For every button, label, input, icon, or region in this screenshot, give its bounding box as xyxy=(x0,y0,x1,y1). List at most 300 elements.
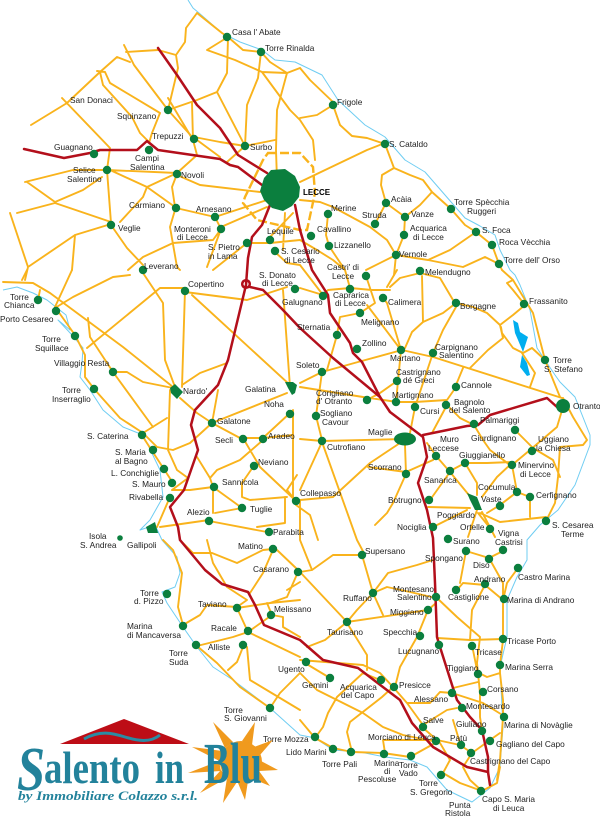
town: Melissano xyxy=(267,604,312,619)
town: Torre S. Stefano xyxy=(541,355,583,374)
town: Collepasso xyxy=(292,488,341,505)
town: Otranto: Otranto xyxy=(573,401,600,411)
town: Frigole: Frigole xyxy=(337,97,363,107)
town: Surbo xyxy=(241,142,273,152)
town: Montesardo: Montesardo xyxy=(466,701,510,711)
town: Martignano xyxy=(392,390,434,406)
town: Torre dell' Orso xyxy=(495,255,560,268)
town: Galatina: Galatina xyxy=(245,384,276,394)
town: Sternatia xyxy=(297,322,341,339)
town: Torre Squillace: Torre xyxy=(42,334,61,344)
town: Villaggio Resta xyxy=(54,358,117,376)
town: Torre Inserraglio: Torre xyxy=(62,385,81,395)
town: Patu xyxy=(450,733,467,749)
town: Torre Suda xyxy=(169,641,200,667)
town: Ortelle xyxy=(460,522,494,533)
town: Supersano xyxy=(358,546,406,559)
town: Marina di Pescoluse xyxy=(358,750,400,784)
town: Aradeo xyxy=(259,431,295,443)
town: Torre Specchia Ruggeri xyxy=(447,197,510,216)
town: Giuggianello: Giuggianello xyxy=(459,450,506,460)
town: Acquarica di Lecce: Acquarica xyxy=(410,223,447,233)
town: Andrano xyxy=(474,574,506,588)
town: Copertino: Copertino xyxy=(188,279,224,289)
town: Salve xyxy=(419,715,444,731)
town: S. Cesarea Terme: S. Cesarea xyxy=(552,520,594,530)
town: Galatone: Galatone xyxy=(217,416,251,426)
town: Lequile: Lequile xyxy=(267,226,294,236)
town: Campi Salentina xyxy=(130,146,165,172)
town: Galugnano xyxy=(282,292,327,307)
town: Punta Ristola: Punta xyxy=(449,800,471,810)
town: Uggiano la Chiesa: la Chiesa xyxy=(536,443,571,453)
town: Castri' di Lecce xyxy=(327,262,370,281)
town: Melissano: Melissano xyxy=(274,604,312,614)
town: Minervino di Lecce xyxy=(508,460,554,479)
town: S. Cataldo: S. Cataldo xyxy=(389,139,428,149)
town: Casa l' Abate xyxy=(223,27,281,41)
logo wordmark: in xyxy=(155,742,184,793)
town: Tiggiano: Tiggiano xyxy=(447,663,479,673)
town: Soleto: Soleto xyxy=(296,360,320,370)
town: Surano xyxy=(444,535,480,546)
town: Salve: Salve xyxy=(423,715,444,725)
town: Scorrano xyxy=(368,462,410,478)
logo wordmark xyxy=(17,731,262,804)
town: Uggiano la Chiesa xyxy=(528,434,571,455)
town: Torre Chianca: Torre xyxy=(10,292,29,302)
town: Taviano: Taviano xyxy=(198,599,227,609)
town: Alezio: Alezio xyxy=(187,507,210,517)
town: Diso: Diso xyxy=(473,560,490,570)
town: Borgagne: Borgagne xyxy=(460,301,496,311)
town: Torre Chianca: Chianca xyxy=(4,300,35,310)
town: Nardo' xyxy=(170,384,208,399)
town: Capo S. Maria di Leuca: di Leuca xyxy=(493,803,525,813)
town: Caprarica di Lecce: Caprarica xyxy=(333,290,369,300)
icon: sun xyxy=(188,722,278,803)
town: Muro Leccese: Leccese xyxy=(428,443,459,453)
town: Acquarica di Lecce: di Lecce xyxy=(413,232,444,242)
town: Acquarica del Capo: Acquarica xyxy=(340,682,377,692)
town: Racale: Racale xyxy=(211,623,237,633)
town: Specchia: Specchia xyxy=(383,627,418,637)
town: Sternatia: Sternatia xyxy=(297,322,331,332)
town: Carpignano Salentino xyxy=(429,342,478,360)
town: Zollino: Zollino xyxy=(362,338,387,348)
town: Cavallino: Cavallino xyxy=(317,224,352,234)
town: Corigliano d'Otranto: d' Otranto xyxy=(316,396,353,406)
town: Surano: Surano xyxy=(453,536,480,546)
town: Lecce xyxy=(260,169,331,211)
town: S. Maria al Bagno: al Bagno xyxy=(115,456,148,466)
town: Torre Inserraglio xyxy=(52,385,98,404)
town: Castrignano del Capo: Castrignano del Capo xyxy=(470,756,551,766)
town: Cocumula xyxy=(478,482,521,496)
town: Vigna Castrisi: Vigna xyxy=(498,528,519,538)
town: Sogliano Cavour: Cavour xyxy=(322,417,349,427)
town: Melignano: Melignano xyxy=(361,317,400,327)
town: Guagnano xyxy=(54,142,98,158)
town: S. Donato di Lecce: di Lecce xyxy=(262,278,293,288)
town: Galatina xyxy=(245,382,297,395)
town: Sannicola xyxy=(210,477,259,491)
town: Isola S. Andrea: Isola xyxy=(89,531,107,541)
town: L. Conchiglie: L. Conchiglie xyxy=(111,468,159,478)
town: Gagliano del Capo: Gagliano del Capo xyxy=(496,739,565,749)
town: Marina di Mancaversa xyxy=(127,621,187,640)
town: Nardo': Nardo' xyxy=(183,386,208,396)
town: Torre Pali xyxy=(322,748,357,769)
town: Caprarica di Lecce: di Lecce xyxy=(335,298,366,308)
town: Andrano: Andrano xyxy=(474,574,506,584)
town: Frigole xyxy=(329,97,363,109)
town: Veglie: Veglie xyxy=(118,223,141,233)
town: Novoli: Novoli xyxy=(181,170,204,180)
town: Maglie xyxy=(368,427,416,446)
town: Galugnano: Galugnano xyxy=(282,297,323,307)
town: Cutrofiano xyxy=(318,437,366,452)
town: Isola S. Andrea: S. Andrea xyxy=(80,540,117,550)
town: S. Cesario di Lecce xyxy=(271,246,320,265)
town: Minervino di Lecce: Minervino xyxy=(518,460,554,470)
lakes xyxy=(513,320,530,376)
town: Zollino xyxy=(353,338,387,353)
town: Capo S. Maria di Leuca: Capo S. Maria xyxy=(482,794,535,804)
town: Torre Squillace xyxy=(35,332,79,353)
town: S. Foca: S. Foca xyxy=(482,225,511,235)
town: Marina di Mancaversa: Marina xyxy=(127,621,153,631)
town: Palmariggi: Palmariggi xyxy=(480,415,519,425)
town: Muro Leccese xyxy=(428,434,459,460)
town: S. Foca xyxy=(472,225,511,236)
town: Cerfignano: Cerfignano xyxy=(536,490,577,500)
town: Marina di Pescoluse: di xyxy=(384,766,391,776)
town: Corsano xyxy=(479,684,519,696)
town: Calimera xyxy=(379,294,422,307)
town: Vanze xyxy=(401,209,434,221)
town: Taurisano xyxy=(327,618,363,637)
town: Sanarica: Sanarica xyxy=(424,475,457,485)
town: Torre Specchia Ruggeri: Ruggeri xyxy=(467,206,496,216)
town: Monteroni di Lecce: Monteroni xyxy=(174,224,211,234)
town: Galatone xyxy=(208,416,251,427)
town: Vigna Castrisi: Castrisi xyxy=(495,537,523,547)
town: Tricase: Tricase xyxy=(475,647,502,657)
town: Presicce: Presicce xyxy=(399,680,431,690)
logo: Salento in Blu xyxy=(17,719,278,804)
town: Soleto xyxy=(296,360,326,376)
town: Ortelle: Ortelle xyxy=(460,522,485,532)
town: Torre Pali: Torre Pali xyxy=(322,759,357,769)
town: Taviano xyxy=(198,599,241,612)
town: Torre d. Pizzo xyxy=(134,588,171,606)
town: Secli: Secli xyxy=(215,435,233,445)
town: Casarano: Casarano xyxy=(253,564,289,574)
town: Secli xyxy=(215,435,247,445)
town: Guagnano: Guagnano xyxy=(54,142,93,152)
town: Tuglie: Tuglie xyxy=(250,504,273,514)
town: Tricase xyxy=(468,642,502,657)
town: Cannole: Cannole xyxy=(461,380,492,390)
town: Giuggianello xyxy=(459,450,506,467)
town: Ruffano: Ruffano xyxy=(343,593,372,603)
town: Gemini xyxy=(302,674,334,690)
town: Spongano xyxy=(425,547,470,563)
town: Nociglia: Nociglia xyxy=(397,522,427,532)
town: Botrugno: Botrugno xyxy=(388,495,422,505)
town: Montesano Salentino: Montesano xyxy=(393,584,434,594)
town: Torre d. Pizzo: Torre xyxy=(140,588,159,598)
town: Lucugnano xyxy=(398,641,443,656)
town: Torre S. Gregorio: S. Gregorio xyxy=(410,787,453,797)
logo wordmark: S xyxy=(17,736,45,804)
town: Roca Vecchia: Roca Vècchia xyxy=(499,237,551,247)
town: Alezio xyxy=(187,507,213,525)
town: Borgagne xyxy=(452,299,496,311)
town: Carmiano xyxy=(129,200,180,212)
town: Alliste: Alliste xyxy=(208,642,231,652)
town: Frassanito xyxy=(520,296,568,308)
town: Morciano di Leuca: Morciano di Leuca xyxy=(368,732,436,742)
town: Melignano xyxy=(356,309,400,327)
town: Cutrofiano: Cutrofiano xyxy=(327,442,366,452)
logo wordmark: alento xyxy=(44,742,140,793)
town: Matino xyxy=(238,541,277,553)
town: Marina di Andrano: Marina di Andrano xyxy=(507,595,575,605)
town: Tiggiano xyxy=(447,663,482,678)
town: Martano xyxy=(390,346,421,363)
town: Porto Cesareo: Porto Cesareo xyxy=(0,314,54,324)
town: L. Conchiglie xyxy=(111,465,168,478)
town: Sogliano Cavour: Sogliano xyxy=(320,408,353,418)
town: Acquarica di Lecce xyxy=(400,223,447,242)
town: Castrignano del Capo xyxy=(467,749,551,766)
town: Cursi xyxy=(411,403,440,416)
town: Matino: Matino xyxy=(238,541,263,551)
town: Lido Marini xyxy=(286,745,337,757)
town: Torre Vado xyxy=(399,752,418,778)
town: Isola S. Andrea xyxy=(80,531,123,550)
town: Torre S. Gregorio xyxy=(410,771,453,797)
town: Vaste: Vaste xyxy=(481,494,502,504)
town: Gallipoli: Gallipoli xyxy=(127,540,157,550)
logo wordmark: Blu xyxy=(204,731,262,796)
town: Trepuzzi: Trepuzzi xyxy=(152,131,184,141)
town: Collepasso: Collepasso xyxy=(300,488,341,498)
town: Castro Marina xyxy=(514,564,570,582)
town: Castiglione xyxy=(448,586,489,602)
town: Casarano xyxy=(253,564,302,576)
town: Lecce: LECCE xyxy=(303,188,331,197)
town: Otranto xyxy=(556,399,600,413)
town: Trepuzzi xyxy=(152,131,198,143)
town: Vernole: Vernole xyxy=(399,249,428,259)
town: Marina di Mancaversa: di Mancaversa xyxy=(127,630,181,640)
town: S. Maria al Bagno: S. Maria xyxy=(115,447,146,457)
town: Salice Salentino: Selice xyxy=(73,165,96,175)
town: Castiglione: Castiglione xyxy=(448,592,489,602)
town: Torre d. Pizzo: d. Pizzo xyxy=(134,596,164,606)
town: Copertino xyxy=(181,279,224,295)
town: Leverano xyxy=(139,261,179,274)
town: Presicce xyxy=(390,680,431,691)
town: Muro Leccese: Muro xyxy=(440,434,459,444)
town: Uggiano la Chiesa: Uggiano xyxy=(538,434,569,444)
town: Frassanito: Frassanito xyxy=(529,296,568,306)
town: Torre S. Gregorio: Torre xyxy=(419,778,438,788)
town: Torre S. Giovanni xyxy=(224,704,274,723)
town: Acaia xyxy=(382,194,412,207)
town: Calimera: Calimera xyxy=(388,297,422,307)
town: Lizzanello: Lizzanello xyxy=(334,240,371,250)
town: Torre Vado: Torre xyxy=(399,760,418,770)
town: Capo S. Maria di Leuca xyxy=(477,787,535,813)
town: Poggiardo xyxy=(437,493,482,520)
town: Ruffano xyxy=(343,589,377,603)
town: Lucugnano: Lucugnano xyxy=(398,646,439,656)
town: Scorrano: Scorrano xyxy=(368,462,402,472)
town: S. Caterina xyxy=(87,431,146,441)
town: Carmiano: Carmiano xyxy=(129,200,165,210)
town: Torre Inserraglio: Inserraglio xyxy=(52,394,91,404)
town: Squinzano xyxy=(117,106,172,121)
town: Minervino di Lecce: di Lecce xyxy=(520,469,551,479)
town: Sanarica xyxy=(424,467,457,485)
town: Surbo: Surbo xyxy=(250,142,273,152)
town: S. Pietro in Lama: in Lama xyxy=(208,251,238,261)
town: Poggiardo: Poggiardo xyxy=(437,510,475,520)
town: Taurisano: Taurisano xyxy=(327,627,363,637)
town: S. Donato di Lecce xyxy=(259,270,299,293)
town: Marina di Novaglie xyxy=(500,713,573,730)
town: S. Pietro in Lama xyxy=(208,239,251,261)
town: Veglie xyxy=(107,221,141,233)
town: Tuglie xyxy=(238,504,273,514)
town: Merine xyxy=(324,203,357,218)
town: Supersano: Supersano xyxy=(365,546,406,556)
town: Aradeo: Aradeo xyxy=(268,431,295,441)
town: Torre Mozza: Torre Mozza xyxy=(263,734,309,744)
town: Squinzano: Squinzano xyxy=(117,111,157,121)
town: S. Mauro: S. Mauro xyxy=(132,479,166,489)
town: Torre dell' Orso: Torre dell' Orso xyxy=(504,255,560,265)
town: Parabita: Parabita xyxy=(273,527,304,537)
town: Martignano: Martignano xyxy=(392,390,434,400)
town: Salice Salentino xyxy=(67,165,111,184)
town: Torre Chianca xyxy=(4,292,42,310)
town: Noha: Noha xyxy=(264,399,284,409)
town: Torre Suda: Torre xyxy=(169,648,188,658)
town: Cursi: Cursi xyxy=(420,406,440,416)
town: Sogliano Cavour xyxy=(312,408,353,427)
town: Monteroni di Lecce xyxy=(174,224,225,242)
town: Torre Specchia Ruggeri: Torre Spècchia xyxy=(454,197,510,207)
town: S. Cesario di Lecce: S. Cesario xyxy=(281,246,320,256)
town: Maglie: Maglie xyxy=(368,427,393,437)
town: Noha xyxy=(264,399,294,418)
town: Castrignano de' Greci: dé Greci xyxy=(403,375,435,385)
icon: red roof xyxy=(60,719,189,744)
town: Torre S. Stefano: S. Stefano xyxy=(544,364,583,374)
town: Tricase Porto: Tricase Porto xyxy=(507,636,556,646)
town: Roca Vecchia xyxy=(488,237,551,249)
town: Corigliano d'Otranto: Corigliano xyxy=(316,388,354,398)
town: Miggiano: Miggiano xyxy=(390,607,424,617)
town: Torre Squillace: Squillace xyxy=(35,343,69,353)
town: Neviano: Neviano xyxy=(258,457,289,467)
town: Lido Marini: Lido Marini xyxy=(286,747,327,757)
town: Acaia: Acàia xyxy=(391,194,412,204)
town: Porto Cesareo xyxy=(0,307,60,324)
town: Arnesano xyxy=(196,204,232,221)
town: Carpignano Salentino: Carpignano xyxy=(435,342,478,352)
town: Cocumula: Cocumula xyxy=(478,482,516,492)
town: Gallipoli xyxy=(127,522,158,550)
town: Bagnolo del Salento xyxy=(442,397,491,415)
town: Struda: Struda xyxy=(362,210,387,220)
town: Spongano: Spongano xyxy=(425,553,463,563)
town: Villaggio Resta: Villaggio Resta xyxy=(54,358,110,368)
town: Castro Marina: Castro Marina xyxy=(518,572,570,582)
town: S. Maria al Bagno xyxy=(115,446,157,466)
town: Vaste xyxy=(481,494,504,510)
town: S. Cesarea Terme xyxy=(542,517,594,539)
town: Castri' di Lecce: Castri' di xyxy=(327,262,359,272)
town: Racale xyxy=(211,623,252,635)
town: Leverano: Leverano xyxy=(144,261,179,271)
town: Vigna Castrisi xyxy=(495,528,523,554)
town: Giurdignano xyxy=(471,426,519,443)
town: Monteroni di Lecce: di Lecce xyxy=(177,232,208,242)
town: S. Caterina: S. Caterina xyxy=(87,431,129,441)
town: Giurdignano: Giurdignano xyxy=(471,433,517,443)
town: Salice Salentino: Salentino xyxy=(67,174,102,184)
town: Ugento xyxy=(278,658,310,674)
logo tagline: by Immobiliare Colazzo s.r.l. xyxy=(18,788,198,803)
town: Specchia xyxy=(383,627,424,640)
town: Torre S. Stefano: Torre xyxy=(553,355,572,365)
town: Sannicola: Sannicola xyxy=(222,477,259,487)
town: Punta Ristola xyxy=(445,800,471,817)
town: Cavallino xyxy=(307,224,352,240)
town: Marina di Novaglie: Marina di Novàglie xyxy=(504,720,573,730)
town: Arnesano: Arnesano xyxy=(196,204,232,214)
town: Acquarica del Capo: del Capo xyxy=(341,690,375,700)
town: S. Pietro in Lama: S. Pietro xyxy=(208,242,240,252)
town: Palmariggi xyxy=(470,415,519,428)
town: Bagnolo del Salento: del Salento xyxy=(449,405,491,415)
town: Castrignano de' Greci: Castrignano xyxy=(396,367,441,377)
town: Caprarica di Lecce xyxy=(333,285,369,308)
town: Martano: Martano xyxy=(390,353,421,363)
town: Neviano xyxy=(250,457,289,470)
town: Marina di Pescoluse: Pescoluse xyxy=(358,774,397,784)
town: Montesano Salentino xyxy=(393,584,440,602)
town: Alliste xyxy=(208,641,247,652)
town: Patu: Patù xyxy=(450,733,467,743)
town: Cannole xyxy=(452,380,492,391)
town: Marina Serra: Marina Serra xyxy=(505,662,553,672)
town: Bagnolo del Salento: Bagnolo xyxy=(454,397,485,407)
town: Acquarica del Capo xyxy=(340,676,385,700)
town: S. Cesarea Terme: Terme xyxy=(561,529,584,539)
town: Corsano: Corsano xyxy=(487,684,519,694)
town: Melendugno: Melendugno xyxy=(425,267,471,277)
town: Carpignano Salentino: Salentino xyxy=(439,350,474,360)
town: Alessano: Alessano xyxy=(414,694,449,704)
town: Torre Rinalda xyxy=(257,43,315,56)
